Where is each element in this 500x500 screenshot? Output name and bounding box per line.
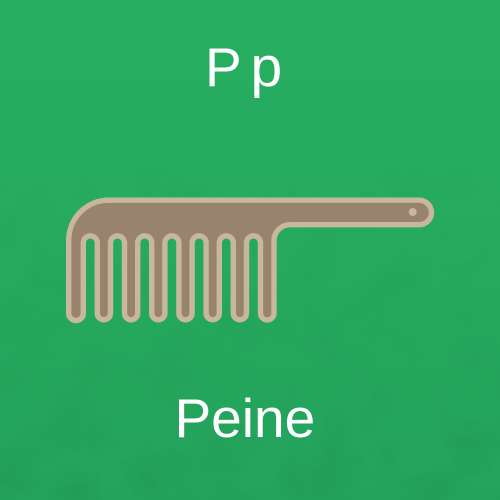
label: Peine: Peine — [174, 387, 315, 449]
comb handle hole — [409, 208, 417, 216]
heading: letter P p: p — [250, 35, 282, 99]
icon: comb — [69, 200, 431, 321]
heading: letter P p — [205, 35, 282, 99]
heading: letter P p: P — [205, 36, 242, 98]
comb body and teeth — [69, 200, 431, 321]
